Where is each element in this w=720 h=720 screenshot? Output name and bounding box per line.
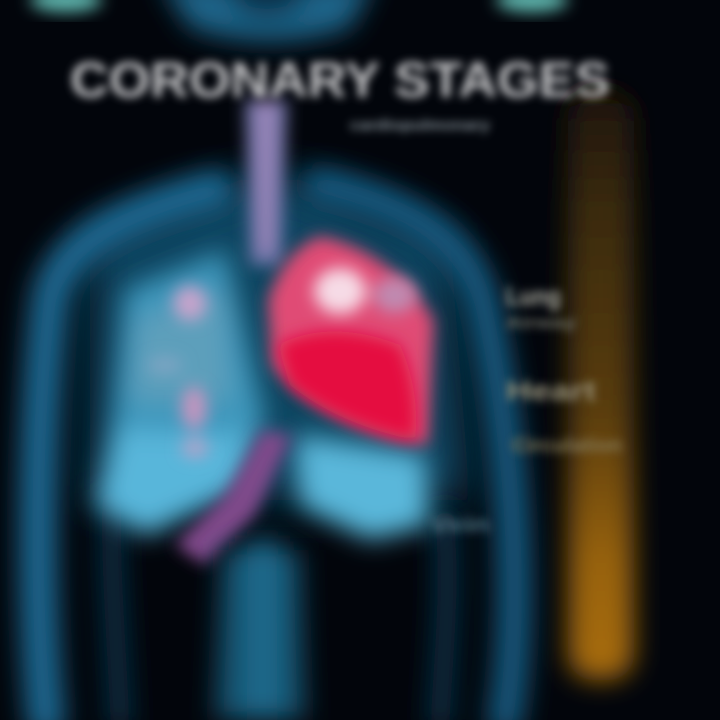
- lung spots: [147, 285, 209, 458]
- lungs: [95, 250, 430, 540]
- side labels: Circulation: [512, 435, 622, 457]
- heart: [268, 236, 434, 445]
- descending vessel: [175, 430, 292, 565]
- side labels: Vein: [430, 512, 490, 537]
- body outline: [38, 185, 514, 720]
- side labels: Airway: [506, 315, 576, 332]
- lower torso: [215, 540, 305, 720]
- subtitle: cardiopulmonary: [350, 117, 491, 134]
- left lung: [95, 250, 265, 535]
- orange side bar: [568, 90, 634, 680]
- side labels: Heart: [506, 375, 596, 406]
- torso shading: [90, 180, 470, 500]
- title: CORONARY STAGES: [70, 52, 610, 108]
- heart highlight: [314, 268, 417, 314]
- side labels: [430, 281, 622, 537]
- right lung: [295, 435, 430, 540]
- top teal blobs: [30, 0, 568, 12]
- neck and head: [160, 0, 375, 42]
- side labels: Lung: [506, 281, 561, 311]
- trachea: [245, 100, 287, 265]
